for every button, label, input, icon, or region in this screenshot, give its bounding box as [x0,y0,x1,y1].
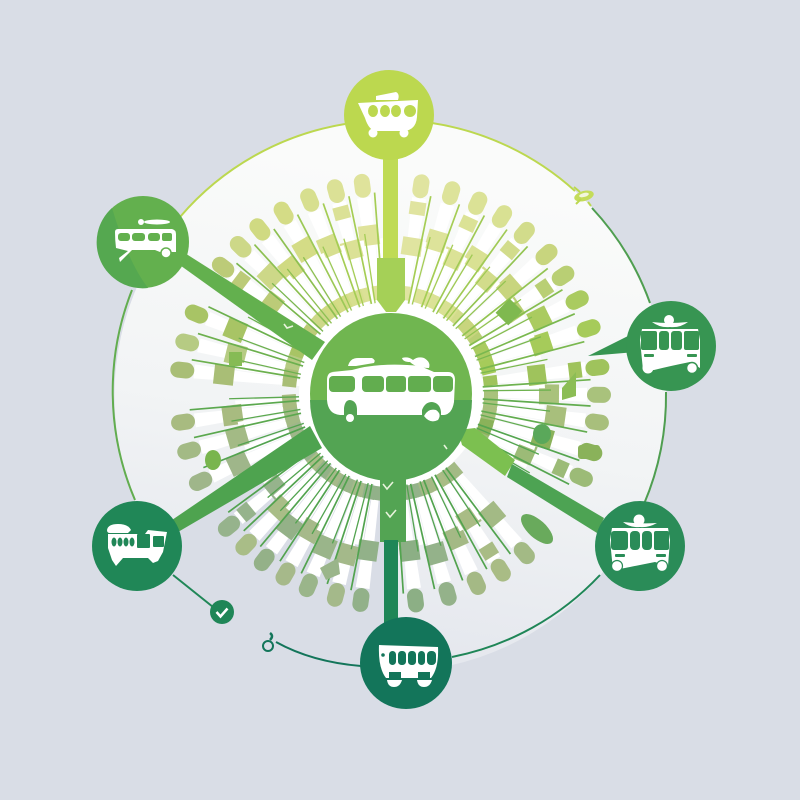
radial rays [169,172,611,614]
node: right bus [626,301,716,391]
lime spinner marker [573,187,595,206]
node: left green bus [97,196,189,288]
spoke: right [588,334,636,356]
ring marker with curved line [263,633,361,666]
central hub circle [284,313,472,517]
large disc behind rays [114,120,666,672]
check badge [210,600,234,624]
white ring around hub [299,302,483,486]
disc outline arcs [113,123,666,657]
node: lower right bus [595,501,685,591]
central bus icon [327,357,455,422]
spoke: upper left [170,250,325,360]
spoke: bottom [380,470,406,624]
spoke: lower left [172,426,322,532]
node: bottom bus [360,617,452,709]
node: bottom left bus [92,501,182,591]
accent blobs among the rays [205,299,600,580]
connector to check badge [173,575,213,607]
spoke: top [377,150,405,312]
node: top lime bus [344,70,434,160]
spoke: lower right [458,428,604,533]
